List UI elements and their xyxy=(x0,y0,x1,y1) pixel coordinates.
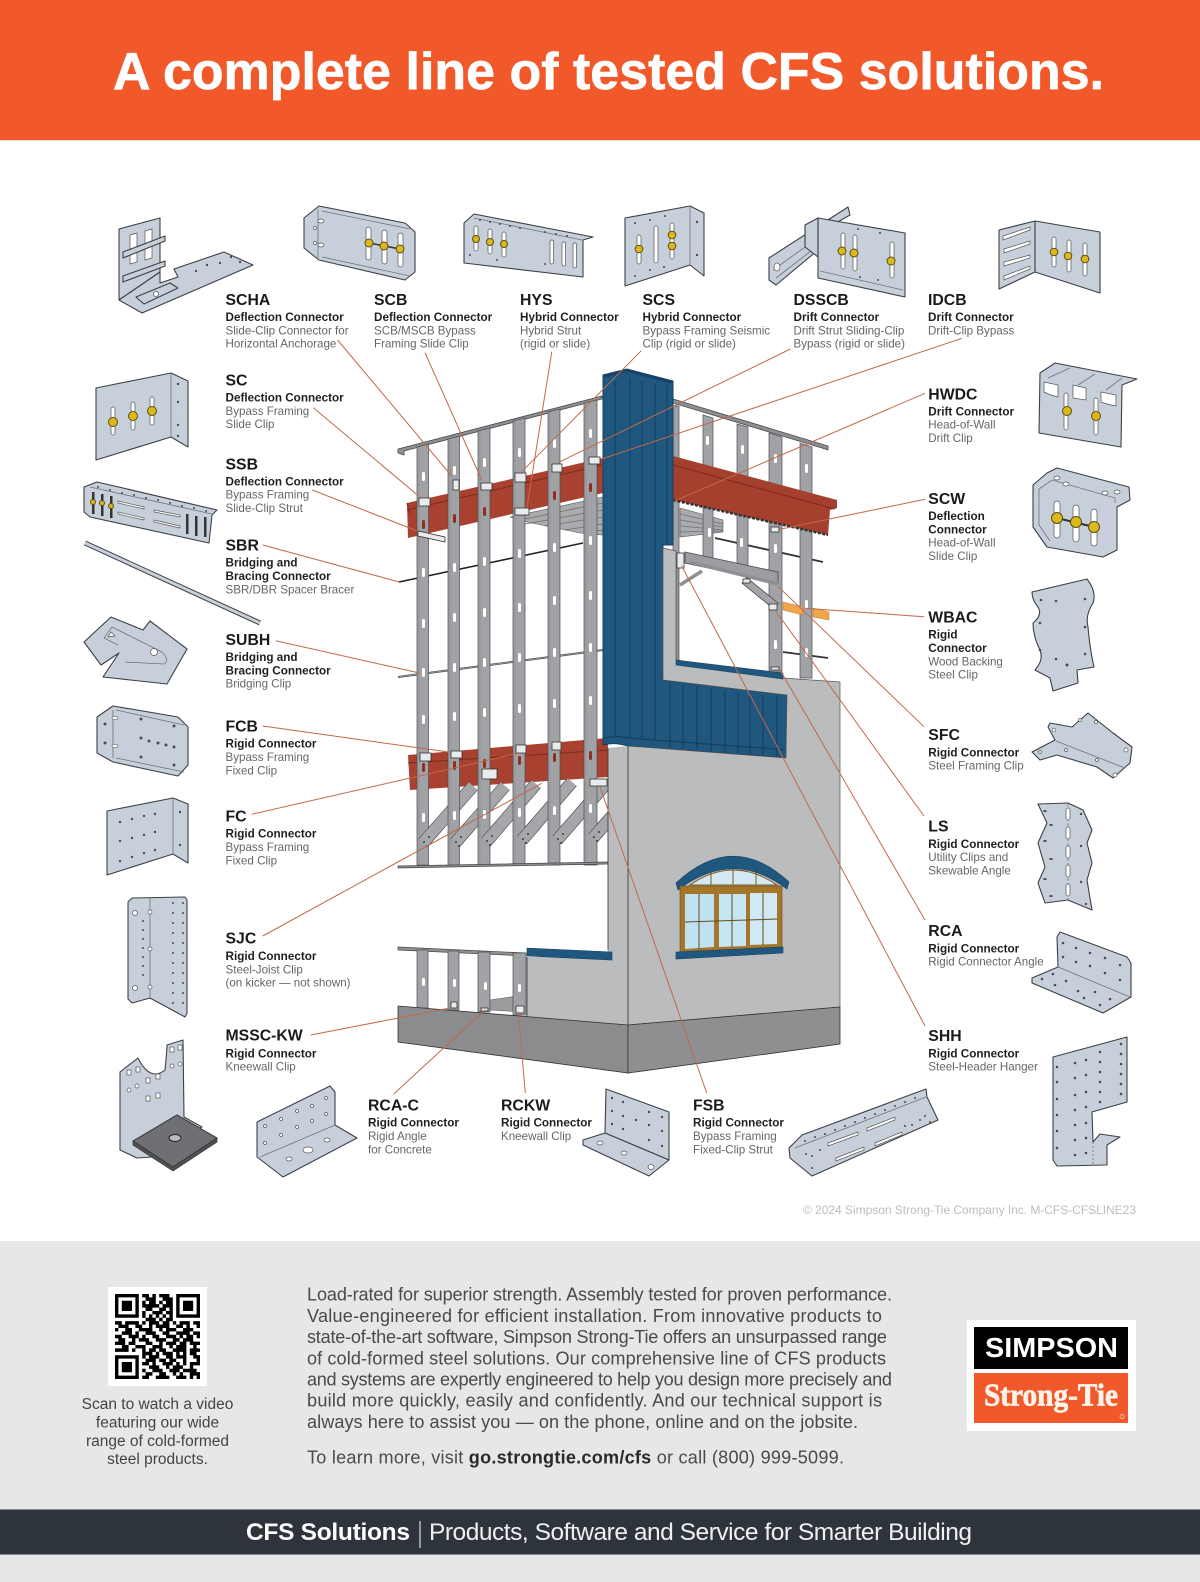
label: SBR: SBR xyxy=(226,538,259,555)
label: SCS: Clip (rigid or slide) xyxy=(642,337,736,350)
upper left top track xyxy=(398,396,602,455)
label: FC: Bypass Framing xyxy=(226,841,309,854)
footer panel xyxy=(0,1241,1200,1582)
label: SC xyxy=(226,373,344,431)
icon: SSB connector xyxy=(84,482,217,543)
QR caption xyxy=(82,1396,233,1468)
QR caption: featuring our wide xyxy=(96,1414,219,1432)
label: LS xyxy=(928,819,1020,877)
label: SCW: Head-of-Wall xyxy=(928,537,996,550)
icon: RCA-C connector xyxy=(257,1086,357,1177)
label: RCA-C: for Concrete xyxy=(368,1143,432,1156)
label: SHH: Rigid Connector xyxy=(928,1047,1020,1060)
QR caption: range of cold-formed xyxy=(86,1433,229,1450)
tagline band: CFS Solutions xyxy=(246,1519,410,1546)
kneewall sill xyxy=(527,948,612,960)
icon: SUBH clip xyxy=(84,617,187,684)
label: SCHA: SCHA xyxy=(226,292,270,309)
leader lines xyxy=(252,338,962,1094)
blue metal panel xyxy=(603,369,787,758)
label: SJC: SJC xyxy=(226,930,256,947)
label: HWDC: Drift Connector xyxy=(928,405,1014,418)
label: RCA: RCA xyxy=(928,923,963,940)
icon: SCS connector xyxy=(625,206,704,286)
header band xyxy=(0,0,1200,141)
Simpson Strong-Tie logo: Strong-Tie xyxy=(984,1377,1118,1413)
arched window xyxy=(676,856,789,959)
label: DSSCB: DSSCB xyxy=(794,292,849,309)
Simpson Strong-Tie logo xyxy=(967,1320,1136,1431)
icon: SBR rod xyxy=(85,543,260,623)
stucco wall xyxy=(527,548,840,1025)
label: HYS: HYS xyxy=(520,292,552,309)
tagline band: Products, Software and Service for Smarter Building xyxy=(429,1519,972,1546)
label: RCA xyxy=(928,923,1044,969)
label: SJC: (on kicker — not shown) xyxy=(226,976,351,989)
label: SUBH: Bridging Clip xyxy=(226,678,291,691)
label: SCB: SCB/MSCB Bypass xyxy=(374,324,476,337)
label: SCHA: Horizontal Anchorage xyxy=(226,337,336,350)
label: SC: Slide Clip xyxy=(226,418,274,431)
installed clips xyxy=(418,457,779,1013)
label: FCB: Fixed Clip xyxy=(226,764,277,777)
label: LS: LS xyxy=(928,819,948,836)
label: HWDC: HWDC xyxy=(928,386,977,403)
label: HWDC: Head-of-Wall xyxy=(928,419,996,432)
label: SFC: Steel Framing Clip xyxy=(928,760,1024,773)
label: SHH: SHH xyxy=(928,1028,962,1045)
diagonal kickers xyxy=(423,782,612,843)
label: SJC: Rigid Connector xyxy=(226,950,317,963)
label: FSB: Fixed-Clip Strut xyxy=(693,1143,774,1156)
upper right decking and bars xyxy=(680,508,828,658)
label: SFC xyxy=(928,727,1024,773)
label: SBR: Bridging and xyxy=(226,557,298,570)
label: SUBH: Bridging and xyxy=(226,651,298,664)
QR code xyxy=(108,1287,207,1386)
foundation xyxy=(398,1006,840,1073)
body copy: and systems are expertly engineered to help you design more precisely and xyxy=(307,1370,892,1390)
label: IDCB: Drift-Clip Bypass xyxy=(928,324,1015,337)
label: SCS: SCS xyxy=(642,292,675,309)
label: SC: Deflection Connector xyxy=(226,392,344,405)
label: RCA-C: Rigid Angle xyxy=(368,1130,427,1143)
label: DSSCB xyxy=(794,292,905,350)
label: RCA-C: RCA-C xyxy=(368,1098,419,1115)
label: IDCB: Drift Connector xyxy=(928,311,1014,324)
kicker feet xyxy=(423,822,607,847)
label: SCW: Slide Clip xyxy=(928,550,977,563)
label: RCA: Rigid Connector xyxy=(928,942,1020,955)
label: SUBH: SUBH xyxy=(226,632,270,649)
kneewall framing xyxy=(398,947,526,1015)
label: FSB: FSB xyxy=(693,1098,725,1115)
label: HWDC: Drift Clip xyxy=(928,432,973,445)
label: MSSC-KW xyxy=(226,1028,317,1074)
icon: RCA connector xyxy=(1032,932,1131,1013)
label: SJC: Steel-Joist Clip xyxy=(226,963,303,976)
icon: FC connector xyxy=(107,798,188,875)
label: WBAC xyxy=(928,609,1003,681)
label: RCA-C xyxy=(368,1098,459,1156)
label: SCHA: Deflection Connector xyxy=(226,311,344,324)
label: SCS: Bypass Framing Seismic xyxy=(642,324,770,337)
copyright note: © 2024 Simpson Strong-Tie Company Inc. M-CFS-CFSLINE23 xyxy=(803,1203,1136,1217)
upper right steel beam xyxy=(673,456,837,535)
label: SFC: Rigid Connector xyxy=(928,746,1020,759)
QR caption: Scan to watch a video xyxy=(82,1396,233,1413)
label: FSB: Rigid Connector xyxy=(693,1117,784,1130)
icon: SJC connector xyxy=(128,897,187,1017)
label: IDCB: IDCB xyxy=(928,292,967,309)
title: A complete line of tested CFS solutions. xyxy=(113,42,1104,100)
icon: SHH connector xyxy=(1053,1037,1127,1166)
label: MSSC-KW: Kneewall Clip xyxy=(226,1061,296,1074)
icon: SCB connector xyxy=(304,206,415,280)
icon: RCKW connector xyxy=(583,1089,669,1176)
window header and kickers xyxy=(676,552,778,660)
label: SUBH xyxy=(226,632,331,691)
label: SCHA xyxy=(226,292,349,350)
label: SBR: SBR/DBR Spacer Bracer xyxy=(226,583,355,596)
label: SSB xyxy=(226,456,344,515)
wood backing xyxy=(783,602,829,620)
label: HYS xyxy=(520,292,619,350)
label: RCKW: RCKW xyxy=(501,1098,550,1115)
label: FSB xyxy=(693,1098,784,1156)
body copy: To learn more, visit go.strongtie.com/cfs or call (800) 999-5099. xyxy=(307,1447,844,1467)
label: FCB xyxy=(226,719,317,777)
label: DSSCB: Drift Connector xyxy=(794,311,880,324)
label: RCKW xyxy=(501,1098,592,1143)
icon: MSSC-KW connector xyxy=(120,1040,217,1171)
icon: SCW connector xyxy=(1033,468,1130,557)
upper right top track xyxy=(673,399,828,450)
lower left steel beam xyxy=(408,738,608,790)
left studs xyxy=(417,400,597,865)
icon: LS connector xyxy=(1038,803,1092,910)
label: SHH xyxy=(928,1028,1038,1074)
upper left steel beam and decking xyxy=(407,458,603,538)
label: SCW: SCW xyxy=(928,491,965,508)
label: DSSCB: Bypass (rigid or slide) xyxy=(794,337,905,350)
icon: IDCB connector xyxy=(999,221,1100,293)
lower left bottom track xyxy=(398,862,608,868)
label: RCKW: Kneewall Clip xyxy=(501,1130,571,1143)
body copy: Load-rated for superior strength. Assembly tested for proven performance. xyxy=(307,1285,892,1305)
label: HWDC xyxy=(928,386,1014,445)
body copy: of cold-formed steel solutions. Our comprehensive line of CFS products xyxy=(307,1348,886,1368)
label: SJC xyxy=(226,930,351,989)
label: LS: Utility Clips and xyxy=(928,851,1008,864)
label: RCA-C: Rigid Connector xyxy=(368,1117,459,1130)
icon: FSB connector xyxy=(789,1089,938,1176)
label: MSSC-KW: MSSC-KW xyxy=(226,1028,303,1045)
label: IDCB xyxy=(928,292,1015,337)
label: HYS: Hybrid Connector xyxy=(520,311,619,324)
label: SCW xyxy=(928,491,996,563)
label: SCB: SCB xyxy=(374,292,407,309)
label: FC: Fixed Clip xyxy=(226,854,277,867)
body copy: Value-engineered for efficient installation. From innovative products to xyxy=(307,1306,882,1326)
body copy: always here to assist you — on the phone, online and on the jobsite. xyxy=(307,1412,858,1432)
label: FCB: Bypass Framing xyxy=(226,751,309,764)
label: LS: Rigid Connector xyxy=(928,838,1020,851)
body copy: build more quickly, easily and confidently. And our technical support is xyxy=(307,1391,882,1411)
label: SCW: Deflection xyxy=(928,510,985,523)
label: SBR: Bracing Connector xyxy=(226,570,331,583)
label: SCB xyxy=(374,292,493,350)
icon: WBAC connector xyxy=(1032,579,1094,691)
label: SSB: SSB xyxy=(226,456,258,473)
label: HYS: Hybrid Strut xyxy=(520,324,582,337)
label: SFC: SFC xyxy=(928,727,960,744)
label: SSB: Deflection Connector xyxy=(226,475,344,488)
label: SCW: Connector xyxy=(928,523,987,536)
body copy: state-of-the-art software, Simpson Strong-Tie offers an unsurpassed range xyxy=(307,1327,887,1347)
label: WBAC: Connector xyxy=(928,642,987,655)
label: SSB: Bypass Framing xyxy=(226,489,309,502)
label: WBAC: WBAC xyxy=(928,609,977,626)
label: SC: SC xyxy=(226,373,247,390)
label: FC: Rigid Connector xyxy=(226,828,317,841)
label: SC: Bypass Framing xyxy=(226,405,309,418)
label: FCB: FCB xyxy=(226,719,258,736)
label: SCB: Deflection Connector xyxy=(374,311,493,324)
icon: HWDC connector xyxy=(1039,363,1137,447)
label: MSSC-KW: Rigid Connector xyxy=(226,1047,317,1060)
label: WBAC: Steel Clip xyxy=(928,668,978,681)
label: FC xyxy=(226,809,317,867)
building illustration xyxy=(398,369,840,1073)
icon: DSSCB connector xyxy=(769,207,905,297)
label: SSB: Slide-Clip Strut xyxy=(226,502,304,515)
label: SCS xyxy=(642,292,770,350)
Simpson Strong-Tie logo: SIMPSON xyxy=(985,1332,1118,1363)
label: HYS: (rigid or slide) xyxy=(520,337,590,350)
tagline band xyxy=(0,1510,1200,1554)
label: SCHA: Slide-Clip Connector for xyxy=(226,324,349,337)
label: WBAC: Wood Backing xyxy=(928,655,1003,668)
icon: SCHA connector xyxy=(119,218,253,313)
label: FSB: Bypass Framing xyxy=(693,1130,777,1143)
label: SCB: Framing Slide Clip xyxy=(374,337,469,350)
bridging bars xyxy=(398,543,603,677)
icon: SC connector xyxy=(96,373,188,460)
icon: HYS connector xyxy=(464,214,593,277)
label: SCS: Hybrid Connector xyxy=(642,311,742,324)
icon: SFC connector xyxy=(1032,713,1132,778)
label: RCA: Rigid Connector Angle xyxy=(928,956,1044,969)
label: FC: FC xyxy=(226,809,247,826)
label: WBAC: Rigid xyxy=(928,629,958,642)
label: FCB: Rigid Connector xyxy=(226,738,317,751)
label: SUBH: Bracing Connector xyxy=(226,664,331,677)
label: SBR xyxy=(226,538,355,596)
right studs xyxy=(673,406,812,678)
QR caption: steel products. xyxy=(107,1451,208,1468)
label: LS: Skewable Angle xyxy=(928,864,1011,877)
label: SHH: Steel-Header Hanger xyxy=(928,1061,1038,1074)
body copy xyxy=(307,1285,892,1467)
label: DSSCB: Drift Strut Sliding-Clip xyxy=(794,324,904,337)
label: RCKW: Rigid Connector xyxy=(501,1117,592,1130)
icon: FCB connector xyxy=(97,706,188,776)
